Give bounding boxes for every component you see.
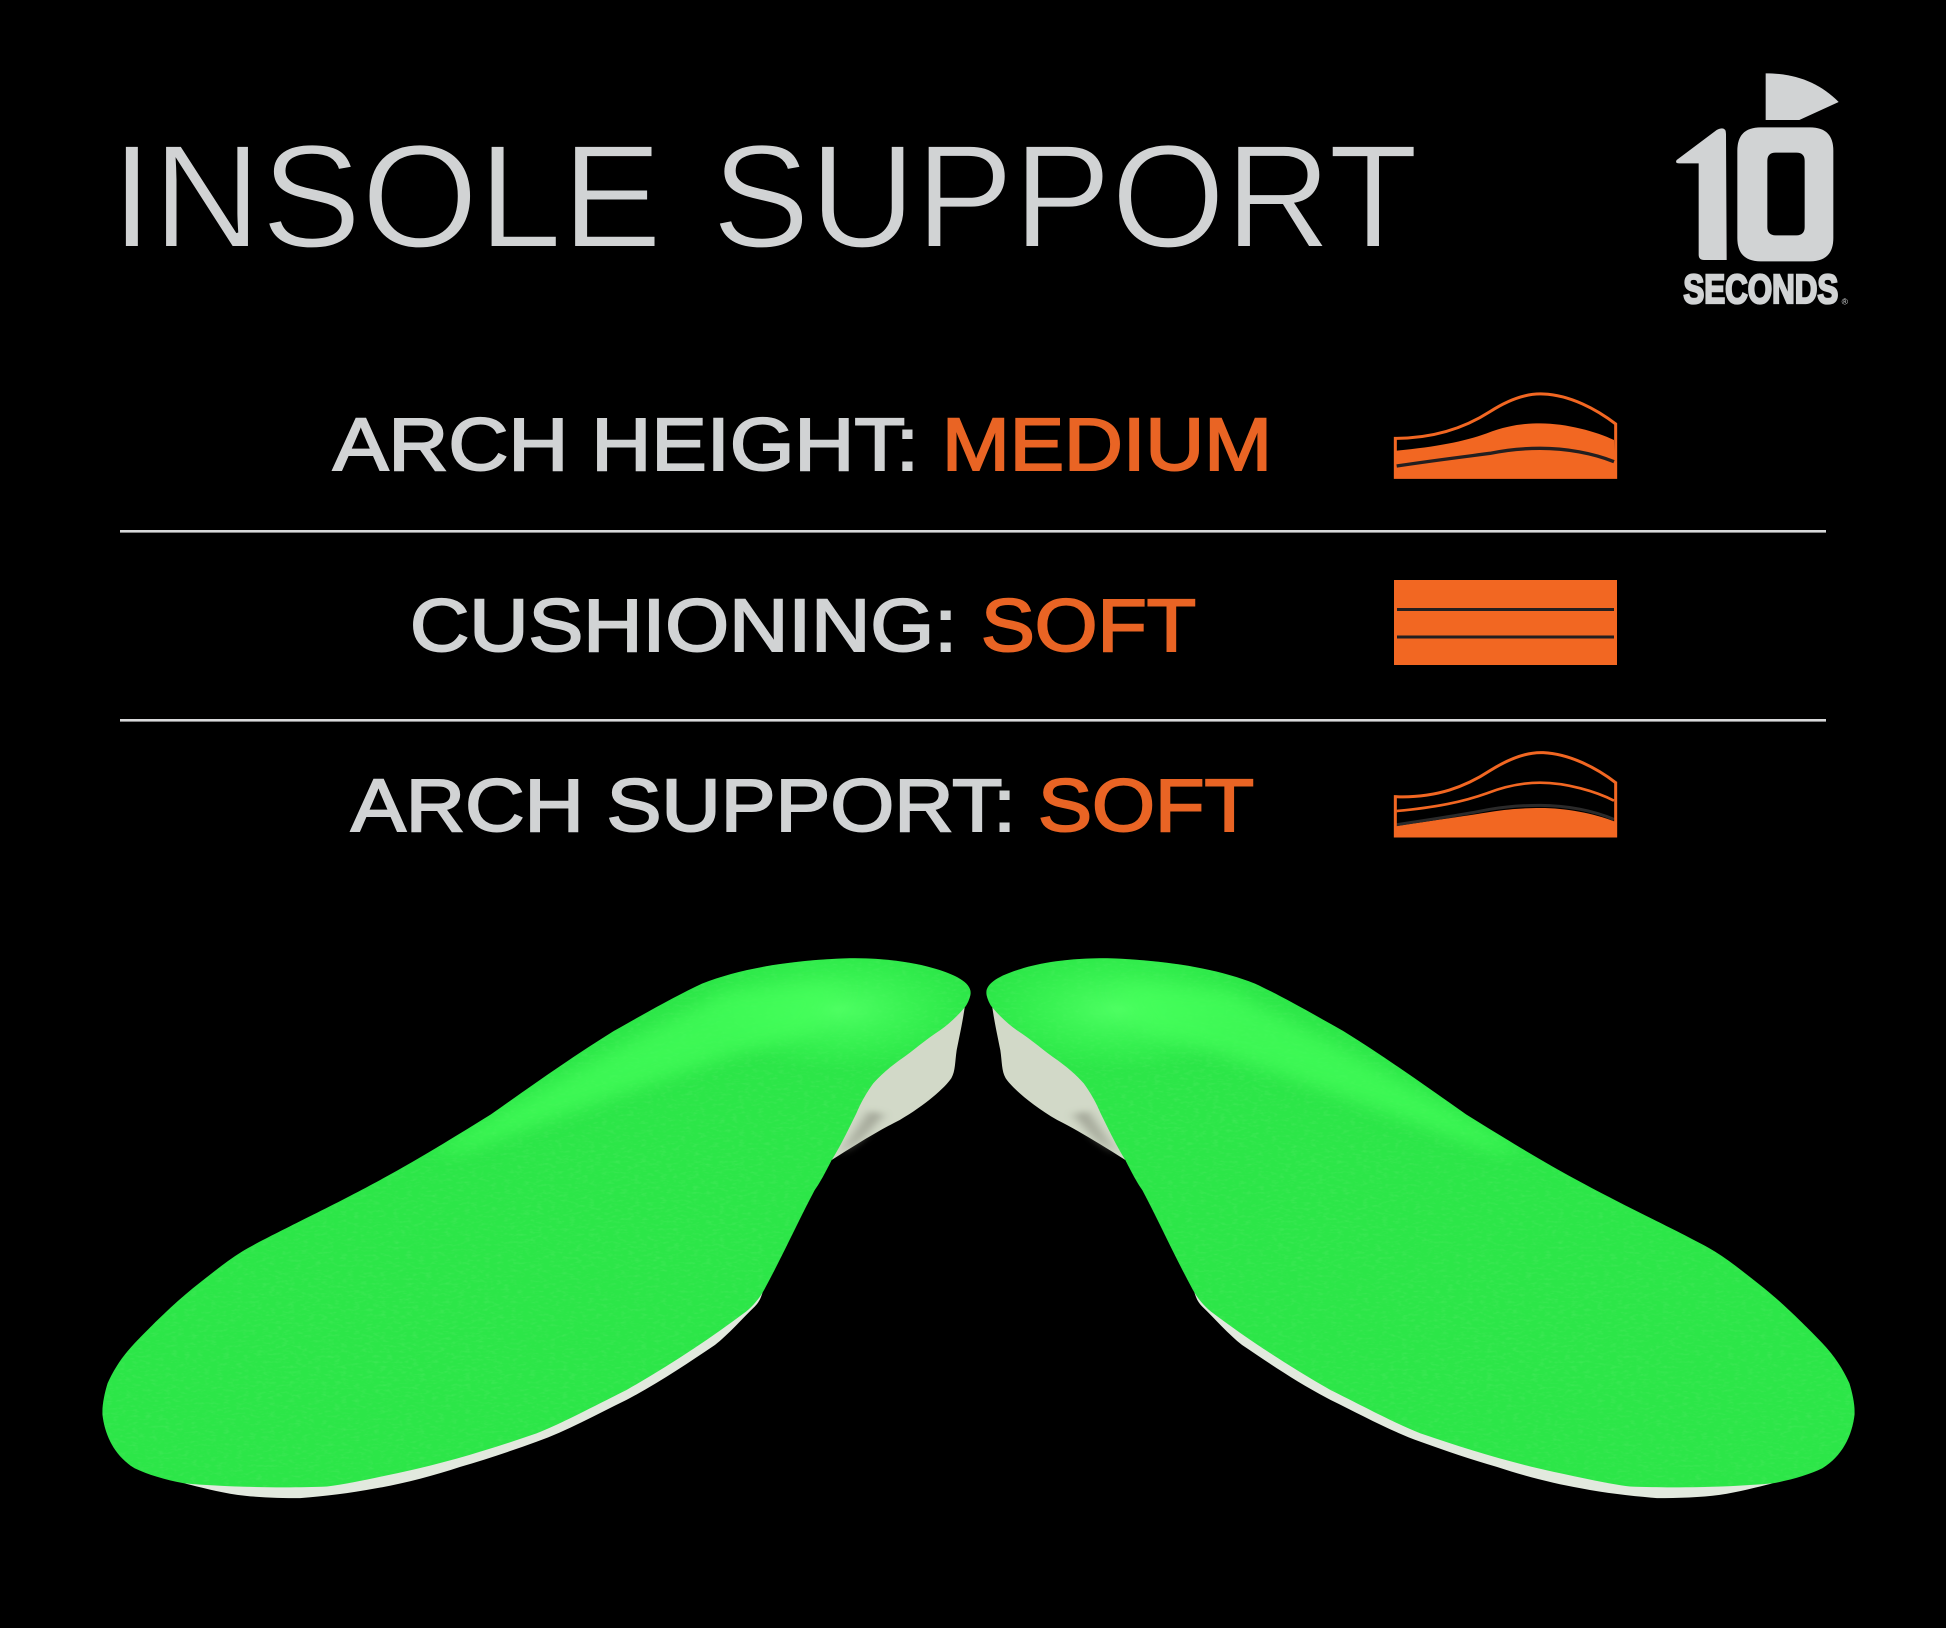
logo digit 1 — [1676, 128, 1727, 260]
icon: arch support profile — [1395, 753, 1616, 836]
row: arch support — [351, 753, 1616, 847]
heel wedge shadow — [1073, 1111, 1117, 1155]
icon: cushioning layers — [1394, 580, 1617, 665]
heel wedge shadow — [840, 1111, 884, 1155]
insole base: heel wedge — [992, 1002, 1138, 1160]
logo digit 0 — [1737, 127, 1833, 261]
value: soft: SOFT — [981, 584, 1196, 667]
logo: 10 Seconds — [1676, 73, 1849, 312]
registered mark: ® — [1842, 296, 1849, 306]
insole top surface — [102, 958, 971, 1488]
logo wordmark: SECONDS — [1683, 266, 1838, 312]
label: arch support: ARCH SUPPORT: — [351, 764, 1016, 847]
divider 2 — [120, 719, 1826, 722]
divider 1 — [120, 530, 1826, 533]
value: soft: SOFT — [1038, 764, 1254, 847]
insole: left — [102, 958, 971, 1498]
logo arrowhead — [1766, 73, 1839, 120]
insole top surface — [986, 958, 1855, 1488]
insole: right — [986, 958, 1855, 1498]
icon: arch height profile — [1395, 394, 1616, 477]
insole base: forefoot edge — [1193, 1285, 1773, 1498]
title — [111, 115, 1418, 279]
insole base: heel wedge — [819, 1002, 965, 1160]
title: INSOLE — [111, 115, 662, 279]
insole base: forefoot edge — [184, 1285, 764, 1498]
label: cushioning: CUSHIONING: — [410, 584, 957, 667]
row: arch height — [333, 394, 1616, 486]
value: medium: MEDIUM — [942, 403, 1272, 486]
row: cushioning — [410, 580, 1617, 667]
title: SUPPORT — [712, 115, 1418, 279]
label: arch height: ARCH HEIGHT: — [333, 403, 919, 486]
